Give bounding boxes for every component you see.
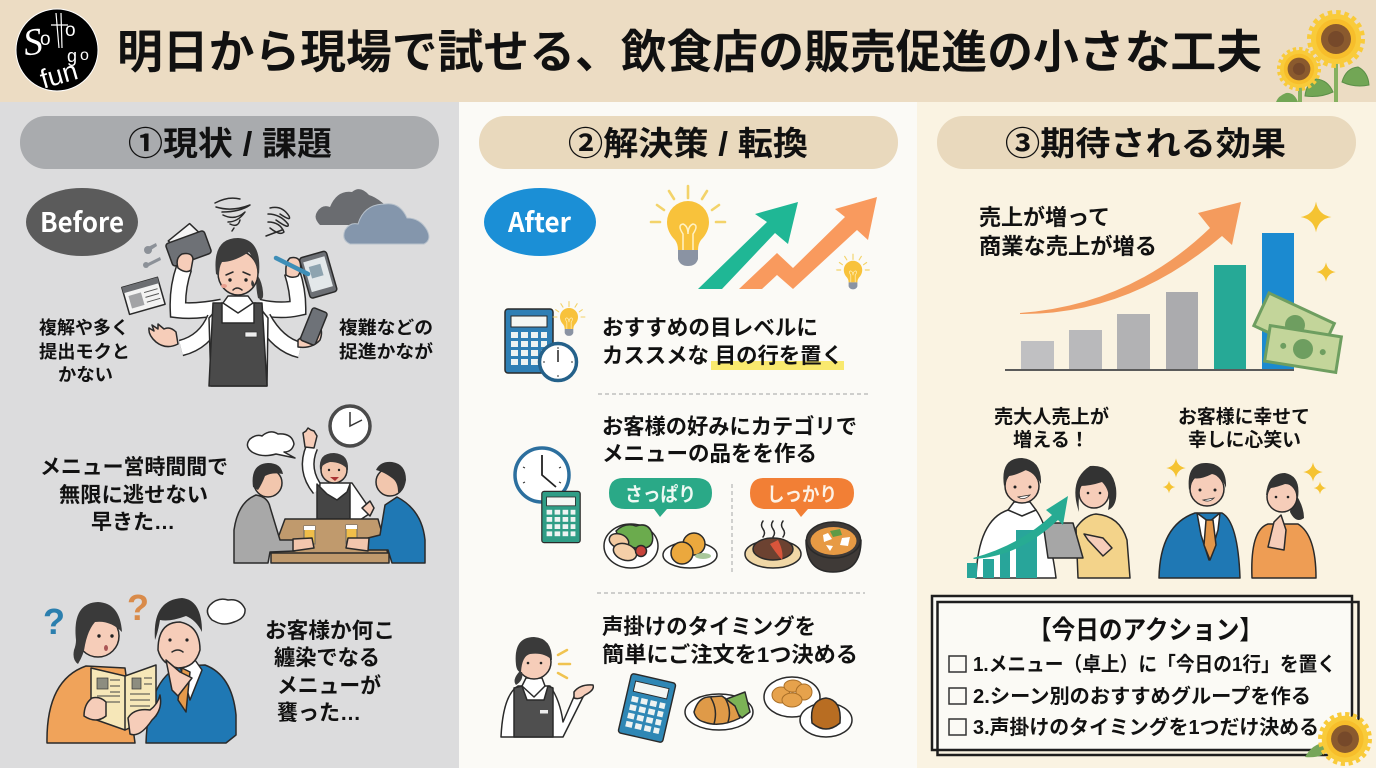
text: benefit right: お客様に幸せて [1178, 406, 1310, 428]
text: second problem [40, 456, 228, 534]
text: step 2: メニューの品をを作る [602, 442, 817, 466]
icon: worry clouds [316, 189, 429, 244]
text: third problem: 纏染でなる [274, 646, 380, 670]
icon: question marks: ? [43, 601, 65, 642]
text: second problem: 早きた… [91, 511, 175, 534]
illustration: confused couple reading menu [43, 587, 245, 743]
customer in grey jacket [234, 463, 314, 563]
action heading: 【今日のアクション】 [1028, 615, 1263, 645]
text: sales headline [979, 205, 1157, 259]
text: first problem right [339, 318, 433, 362]
logo: fun [37, 55, 81, 95]
text: step 2: お客様の好みにカテゴリで [602, 414, 857, 439]
arrow: growth trend [1020, 202, 1241, 314]
text: benefit left [994, 405, 1109, 451]
logo: o [40, 29, 51, 50]
food: muffin plate [800, 698, 852, 737]
head [256, 276, 263, 299]
text: first problem right: 複難などの [339, 318, 433, 338]
logo: o [80, 47, 89, 64]
food: salad plate [604, 524, 658, 568]
text: benefit right [1178, 406, 1310, 451]
food: cutlet plate [685, 692, 753, 730]
text: first problem left: 提出モクと [39, 341, 130, 362]
hands [149, 254, 322, 347]
waiter raising hand [303, 428, 374, 520]
illustration: overwhelmed staff member [122, 220, 337, 386]
man in suit [1159, 463, 1240, 578]
section heading pill: solution [479, 116, 898, 169]
icon: clock with calculator [515, 448, 580, 543]
row: step 1 [505, 302, 844, 380]
icon: large light bulb [651, 186, 725, 266]
icon: teal rising arrow [698, 202, 798, 289]
text: benefit right: 幸しに心笑い [1188, 429, 1301, 451]
section heading pill: current situation [20, 116, 439, 169]
table with drinks [271, 519, 389, 563]
customer in blue jacket [346, 462, 425, 563]
speech bubble [247, 432, 295, 458]
panel: solution [459, 102, 917, 768]
icon: pen [276, 258, 308, 274]
badge: Before [26, 188, 138, 256]
thought bubble [207, 599, 245, 624]
food: fried chicken plate [764, 677, 820, 717]
text: third problem: 饔った… [277, 701, 361, 725]
highlight marker [711, 361, 844, 370]
icon: sparkles [1301, 202, 1336, 282]
icon: confusion swirls [215, 198, 290, 236]
text: step 3: 声掛けのタイミングを [602, 614, 816, 639]
illustration: satisfied customers [1159, 458, 1326, 578]
woman in yellow sweater [1075, 466, 1130, 578]
text: first problem left [39, 317, 130, 385]
icon: web page card [122, 277, 165, 314]
woman in orange sweater [1252, 473, 1316, 578]
text: step 1: カススメな 目の行を置く [602, 344, 843, 368]
icon: small light bulb [837, 254, 869, 289]
icon: question marks: ? [127, 587, 149, 628]
text: first problem left: 複解や多く [39, 317, 129, 338]
icon: orange zigzag arrow [739, 197, 877, 289]
bar chart: rising sales [1005, 233, 1294, 371]
tag: light menu [609, 478, 712, 517]
icon: wallet [161, 220, 212, 267]
panel: expected results [917, 102, 1376, 768]
icon: wall clock [330, 406, 370, 446]
icon: calculator with clock [505, 302, 585, 380]
icon: phone [300, 307, 328, 346]
text: first problem right: 捉進かなが [339, 341, 433, 362]
logo: o [65, 20, 76, 41]
icon: question marks [43, 587, 149, 642]
text: step 2 [602, 414, 857, 466]
title: 明日から現場で試せる、飲食店の販売促進の小さな工夫 [117, 26, 1262, 78]
open menu [84, 665, 161, 735]
text: step 3 [602, 614, 858, 667]
text: sales headline: 商業な売上が増る [979, 234, 1157, 259]
tag: light menu: さっぱり [625, 484, 696, 506]
text: sales headline: 売上が増って [979, 205, 1110, 230]
text: first problem left: かない [58, 365, 113, 385]
icon: tablet [299, 251, 337, 299]
badge: After [484, 188, 596, 256]
text: step 1: おすすめの目レベルに [602, 316, 818, 340]
tag: hearty menu [750, 478, 854, 517]
illustration: busy restaurant table [234, 406, 425, 563]
text: step 3: 簡単にご注文を1つ決める [602, 642, 858, 667]
icon: corner sunflower [1305, 716, 1368, 762]
action 2: 2.シーン別のおすすめグループを作る [973, 684, 1311, 708]
panel: current situation [0, 102, 459, 768]
row: step 2 [515, 414, 861, 572]
row: step 3 [501, 614, 858, 743]
section heading pill: current situation: ①現状 / 課題 [128, 125, 332, 162]
icon: bolts [143, 243, 161, 268]
man [146, 598, 236, 743]
presentation board [1043, 523, 1083, 558]
icon: sunflowers [1276, 14, 1369, 102]
illustration: happy staff with chart [967, 458, 1130, 578]
action 1: 1.メニュー（卓上）に「今日の1行」を置く [973, 653, 1336, 676]
man in white shirt [976, 458, 1056, 578]
text: second problem: メニュー営時間間で [40, 456, 228, 479]
text: third problem: お客様か何こ [265, 619, 395, 643]
mini bars and teal arrow [967, 496, 1068, 578]
food: croquette plate [663, 533, 717, 568]
callout: today's actions [932, 596, 1358, 755]
food: hamburger steak [745, 521, 801, 568]
section heading pill: results [937, 116, 1356, 169]
text: second problem: 無限に逃せない [59, 484, 208, 507]
tag: hearty menu: しっかり [767, 484, 837, 506]
pointing hand [1084, 534, 1112, 556]
text: step 1 [602, 316, 843, 368]
logo: S [20, 20, 45, 65]
icon: money bills [1254, 293, 1341, 372]
woman [47, 602, 135, 743]
header band [0, 0, 1376, 102]
torso and apron [209, 303, 268, 386]
arms [178, 268, 298, 311]
text: third problem: メニューが [277, 673, 381, 698]
sparkles [1163, 458, 1326, 494]
section heading pill: solution: ②解決策 / 転換 [568, 125, 808, 162]
text: benefit left: 売大人売上が [994, 405, 1109, 428]
section heading pill: results: ③期待される効果 [1005, 125, 1286, 162]
food: miso soup bowl [806, 522, 861, 572]
text: benefit left: 増える！ [1013, 429, 1089, 451]
action 3: 3.声掛けのタイミングを1つだけ決める [973, 715, 1319, 739]
badge: After: After [507, 201, 571, 240]
illustration: staff gesturing [501, 637, 593, 737]
text: third problem [265, 619, 395, 725]
badge: Before: Before [40, 201, 124, 240]
logo [16, 9, 98, 95]
logo: g [67, 46, 77, 66]
icon: tilted calculator [618, 673, 676, 743]
